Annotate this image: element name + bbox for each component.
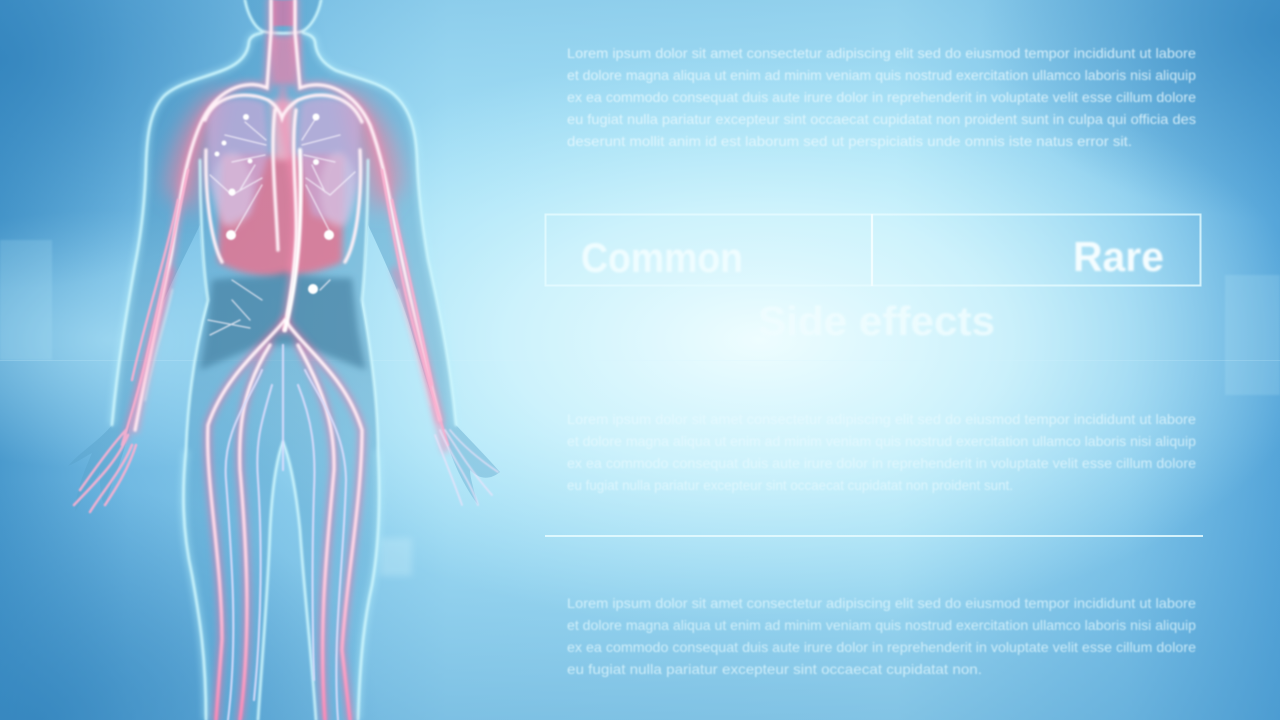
- top paragraph: ex ea commodo consequat duis aute irure dolor in reprehenderit in voluptate velit esse cillum dolore: [567, 89, 1196, 105]
- abdomen dark area: [200, 272, 366, 370]
- bottom paragraph: Lorem ipsum dolor sit amet consectetur adipiscing elit sed do eiusmod tempor incididunt ut labore: [567, 595, 1196, 611]
- body outline: [112, 0, 456, 720]
- chest and shoulder red glow: [166, 85, 402, 215]
- top paragraph: deserunt mollit anim id est laborum sed ut perspiciatis unde omnis iste natus error sit.: [567, 133, 1132, 149]
- central aorta: [285, 150, 301, 330]
- neck and thoracic vessels: [135, 0, 440, 430]
- lung nodes: [214, 114, 334, 294]
- bottom paragraph: [567, 595, 1196, 677]
- top paragraph: eu fugiat nulla pariatur excepteur sint occaecat cupidatat non proident sunt in culpa qui officia des: [567, 111, 1196, 127]
- lung branches: [208, 118, 355, 335]
- top paragraph: [567, 45, 1196, 149]
- label: rare: Rare: [1073, 233, 1164, 280]
- middle paragraph: Lorem ipsum dolor sit amet consectetur adipiscing elit sed do eiusmod tempor incididunt ut labore: [567, 411, 1196, 427]
- body silhouette: [68, 0, 500, 720]
- arm vessels and fingers: [74, 170, 498, 512]
- bottom paragraph: eu fugiat nulla pariatur excepteur sint occaecat cupidatat non.: [567, 661, 982, 677]
- bottom paragraph: et dolore magna aliqua ut enim ad minim veniam quis nostrud exercitation ullamco laboris nisi aliquip: [567, 617, 1196, 633]
- middle paragraph: ex ea commodo consequat duis aute irure dolor in reprehenderit in voluptate velit esse cillum dolore: [567, 455, 1196, 471]
- top paragraph: et dolore magna aliqua ut enim ad minim veniam quis nostrud exercitation ullamco laboris nisi aliquip: [567, 67, 1196, 83]
- bottom paragraph: ex ea commodo consequat duis aute irure dolor in reprehenderit in voluptate velit esse cillum dolore: [567, 639, 1196, 655]
- abdominal and leg vessels: [125, 150, 445, 720]
- middle paragraph: eu fugiat nulla pariatur excepteur sint occaecat cupidatat non proident sunt.: [567, 477, 1013, 493]
- label: common: Common: [581, 234, 743, 281]
- middle paragraph: [567, 411, 1196, 493]
- divider line: [545, 535, 1203, 537]
- lungs and heart red area: [208, 0, 360, 276]
- human body illustration: [68, 0, 500, 720]
- heading: side effects: Side effects: [758, 298, 995, 344]
- top paragraph: Lorem ipsum dolor sit amet consectetur adipiscing elit sed do eiusmod tempor incididunt ut labore: [567, 45, 1196, 61]
- table: common and rare: [546, 214, 1200, 286]
- outline glow: [112, 33, 456, 720]
- middle paragraph: et dolore magna aliqua ut enim ad minim veniam quis nostrud exercitation ullamco laboris nisi aliquip: [567, 433, 1196, 449]
